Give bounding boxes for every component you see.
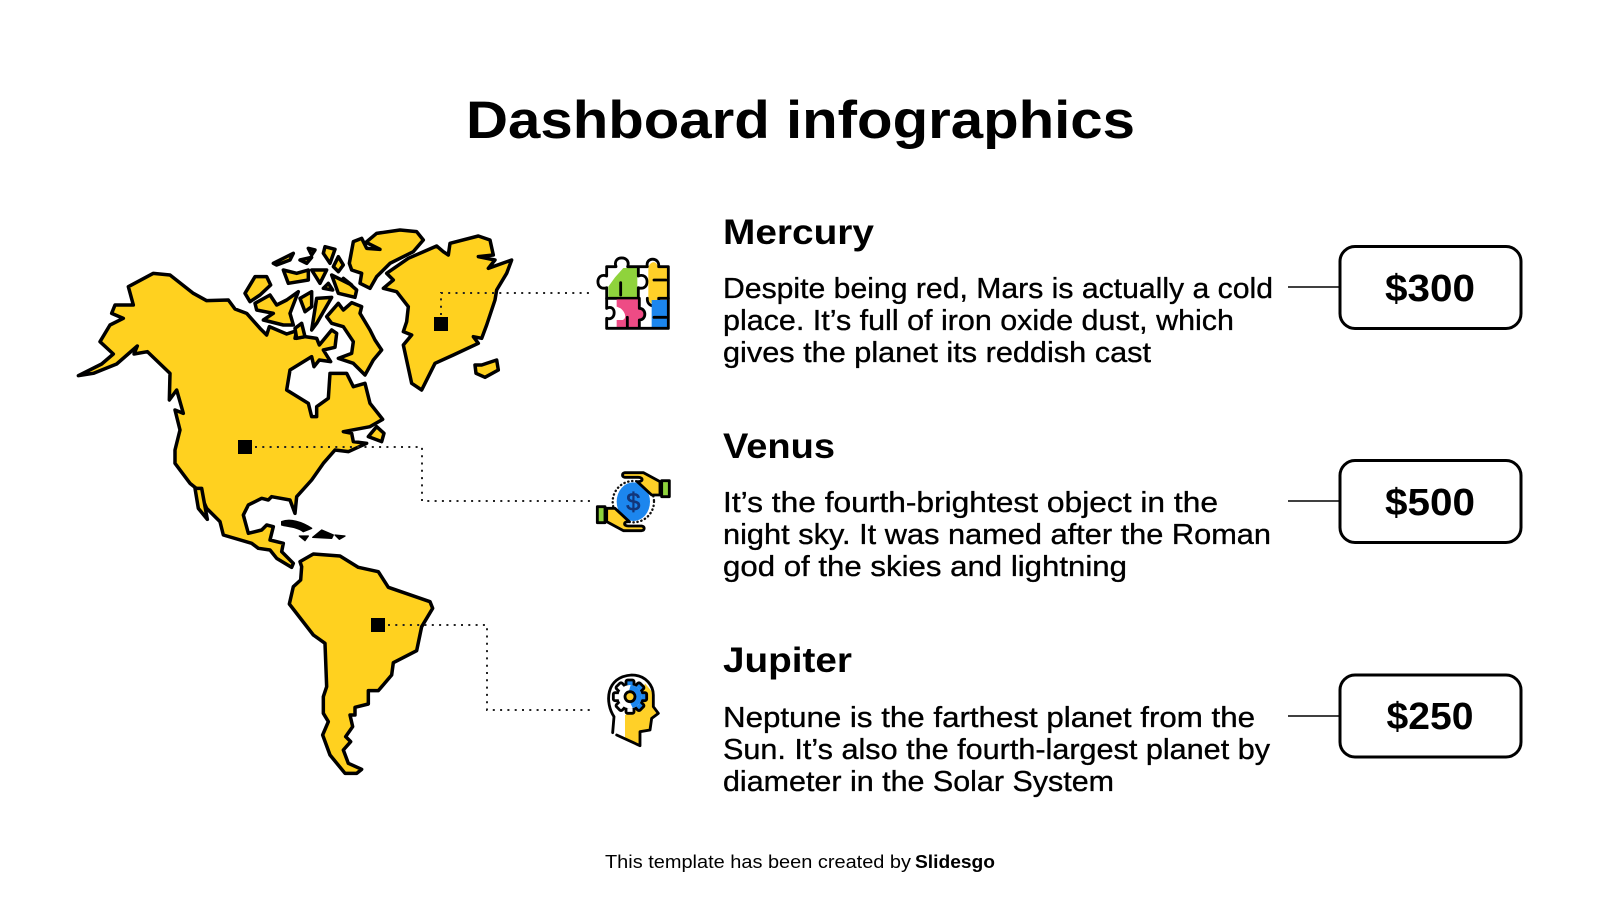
panel: Venus bbox=[723, 427, 1521, 583]
text: Venus description bbox=[723, 487, 1271, 583]
text: Venus description: night sky. It was named after the Roman bbox=[723, 519, 1271, 551]
panel: Mercury bbox=[723, 213, 1521, 369]
map: Baja California bbox=[195, 488, 207, 519]
text: Mercury description bbox=[723, 273, 1273, 369]
map: Arctic islands bbox=[245, 230, 423, 442]
text: Mercury description: place. It’s full of iron oxide dust, which bbox=[723, 305, 1234, 337]
value: $300: $300 bbox=[1385, 268, 1475, 310]
title: Dashboard infographics bbox=[466, 91, 1135, 150]
footer credit: Slidesgo bbox=[915, 852, 995, 872]
value: $300 bbox=[1288, 246, 1521, 328]
text: Venus description: It’s the fourth-brightest object in the bbox=[723, 487, 1218, 519]
text: Jupiter description: Neptune is the farthest planet from the bbox=[723, 702, 1255, 734]
connector: South America to head icon bbox=[371, 618, 592, 710]
value: $250 bbox=[1288, 675, 1521, 757]
panel: Jupiter bbox=[723, 641, 1521, 798]
text: Mercury description: Despite being red, Mars is actually a cold bbox=[723, 273, 1273, 305]
map: Greenland bbox=[383, 236, 512, 390]
map: South America bbox=[289, 554, 433, 773]
text: Jupiter description: Sun. It’s also the fourth-largest planet by bbox=[723, 734, 1271, 766]
value: $250: $250 bbox=[1386, 696, 1474, 738]
text: Mercury description: gives the planet its reddish cast bbox=[723, 337, 1151, 369]
text: Jupiter description: diameter in the Solar System bbox=[723, 766, 1114, 798]
map of the Americas bbox=[78, 230, 512, 773]
coin bbox=[617, 482, 650, 521]
heading: Mercury: Mercury bbox=[723, 213, 875, 252]
icon: hands holding coin bbox=[597, 473, 669, 531]
connector: North America to hands icon bbox=[238, 440, 592, 501]
heading: Jupiter: Jupiter bbox=[723, 641, 852, 680]
top hand bbox=[622, 473, 669, 497]
text: Jupiter description bbox=[723, 702, 1271, 798]
footer credit: This template has been created by bbox=[605, 852, 911, 872]
map: North America mainland bbox=[78, 273, 383, 567]
icon: puzzle bbox=[598, 258, 668, 328]
icon: hands holding coin: $ bbox=[626, 489, 640, 517]
heading: Venus: Venus bbox=[723, 427, 835, 466]
map: Caribbean islands bbox=[282, 520, 345, 541]
gear bbox=[613, 680, 647, 713]
icon: head with gear bbox=[609, 675, 658, 746]
map: Iceland bbox=[475, 360, 498, 377]
value: $500: $500 bbox=[1385, 482, 1475, 524]
connector: Greenland to puzzle icon bbox=[434, 293, 592, 331]
text: Venus description: god of the skies and lightning bbox=[723, 551, 1127, 583]
value: $500 bbox=[1288, 460, 1521, 542]
bottom hand bbox=[597, 507, 644, 531]
